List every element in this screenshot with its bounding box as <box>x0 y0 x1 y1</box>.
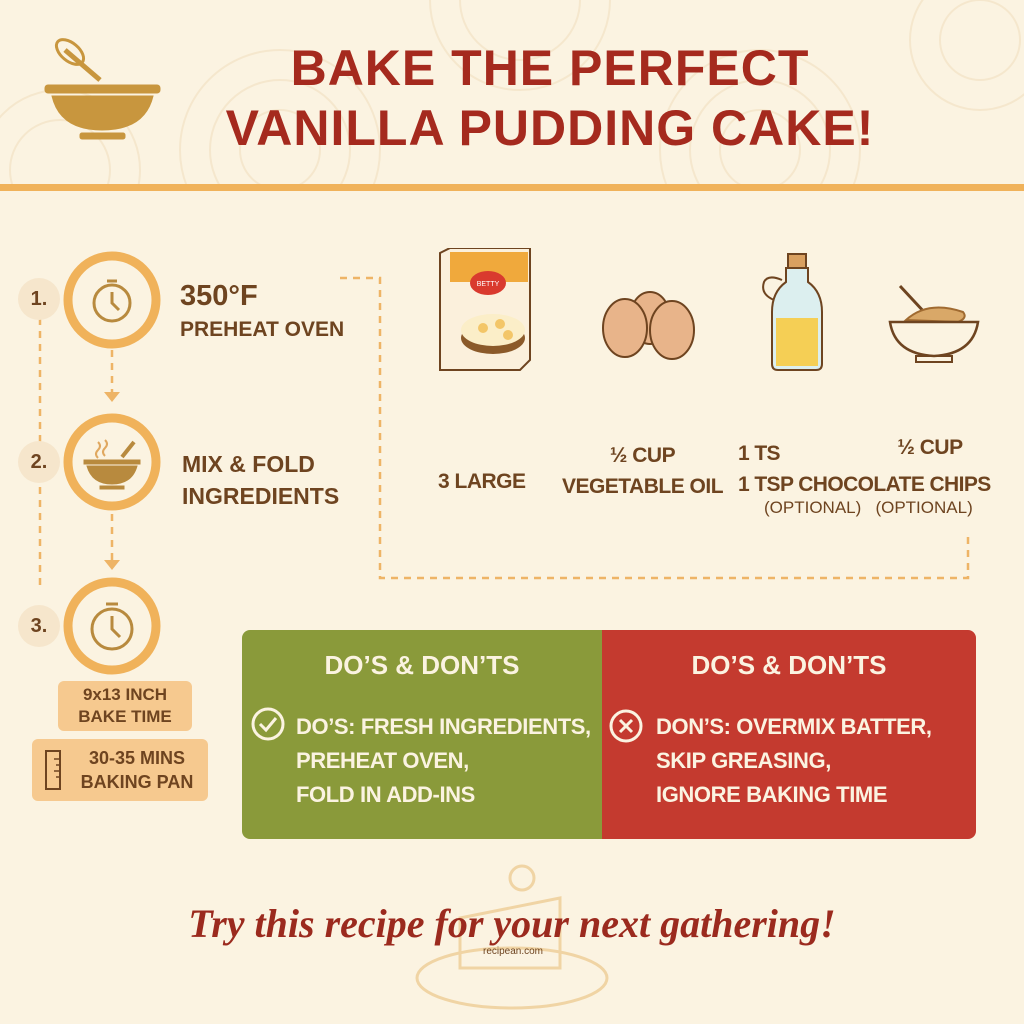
icon: whisk bowl <box>44 38 160 140</box>
ingredient: cake mix box <box>439 248 531 371</box>
icon: check <box>252 708 284 740</box>
do's text: PREHEAT OVEN, <box>296 748 469 773</box>
do's text: FOLD IN ADD-INS <box>296 782 475 807</box>
ingredient labels: 3 LARGE <box>438 470 526 493</box>
box: 9x13 inch: BAKE TIME <box>78 707 172 726</box>
icon: faint cake slice <box>416 864 608 1010</box>
text: 1 TSP CHOCOLATE CHIPS <box>738 473 991 496</box>
box: 30-35 mins: BAKING PAN <box>81 772 193 792</box>
text: 1 TS <box>738 442 780 465</box>
do's heading: DO’S & DON’TS <box>324 650 520 680</box>
don'ts text <box>656 714 932 807</box>
box: 30-35 mins <box>32 739 208 801</box>
don'ts text: DON’S: OVERMIX BATTER, <box>656 714 932 739</box>
step 1 <box>18 252 344 348</box>
step 2 number: 2. <box>31 451 47 473</box>
step 2 number <box>18 441 60 483</box>
do's text: DO’S: FRESH INGREDIENTS, <box>296 714 591 739</box>
step 2 text: MIX & FOLD <box>182 451 315 477</box>
box: 9x13 inch <box>58 681 192 731</box>
do's text <box>296 714 591 807</box>
don'ts heading: DO’S & DON’TS <box>691 650 886 680</box>
step 1 number: 1. <box>31 288 47 310</box>
icon: ruler <box>45 750 61 790</box>
don'ts text: SKIP GREASING, <box>656 748 831 773</box>
step 2 text: INGREDIENTS <box>182 483 339 509</box>
panel: do's <box>242 630 602 839</box>
box: 30-35 mins: 30-35 MINS <box>89 748 185 768</box>
divider <box>0 184 1024 191</box>
ingredient: chips bowl <box>888 285 980 363</box>
text: (OPTIONAL) (OPTIONAL) <box>764 498 973 517</box>
step 1 number <box>18 278 60 320</box>
step 3 number <box>18 605 60 647</box>
step 3 number: 3. <box>31 615 47 637</box>
footer tagline: Try this recipe for your next gathering! <box>188 901 836 946</box>
step 2 icon: mixing bowl <box>64 414 160 510</box>
step 3 icon: stopwatch <box>64 578 160 674</box>
text: ½ CUP <box>897 436 963 459</box>
box: 9x13 inch: 9x13 INCH <box>83 685 167 704</box>
step 1: PREHEAT OVEN <box>180 318 344 341</box>
text: VEGETABLE OIL <box>562 475 723 498</box>
step 2 <box>18 414 339 510</box>
watermark: recipean.com <box>483 946 543 957</box>
step 1 icon: stopwatch <box>64 252 160 348</box>
don'ts text: IGNORE BAKING TIME <box>656 782 887 807</box>
icon: cross <box>610 710 642 742</box>
step 2 text <box>182 451 339 509</box>
title: BAKE THE PERFECT <box>291 40 809 96</box>
panel: don'ts <box>602 630 976 839</box>
text: ½ CUP <box>610 444 675 467</box>
step 3 <box>18 578 160 674</box>
title: VANILLA PUDDING CAKE! <box>226 100 874 156</box>
title <box>226 40 874 156</box>
step 1 text: 350°F <box>180 280 258 312</box>
header background pattern <box>0 0 1024 184</box>
ingredient: eggs <box>602 291 695 360</box>
ingredient: oil bottle <box>762 253 823 371</box>
ingredient: cake mix box: BETTY <box>477 281 500 288</box>
